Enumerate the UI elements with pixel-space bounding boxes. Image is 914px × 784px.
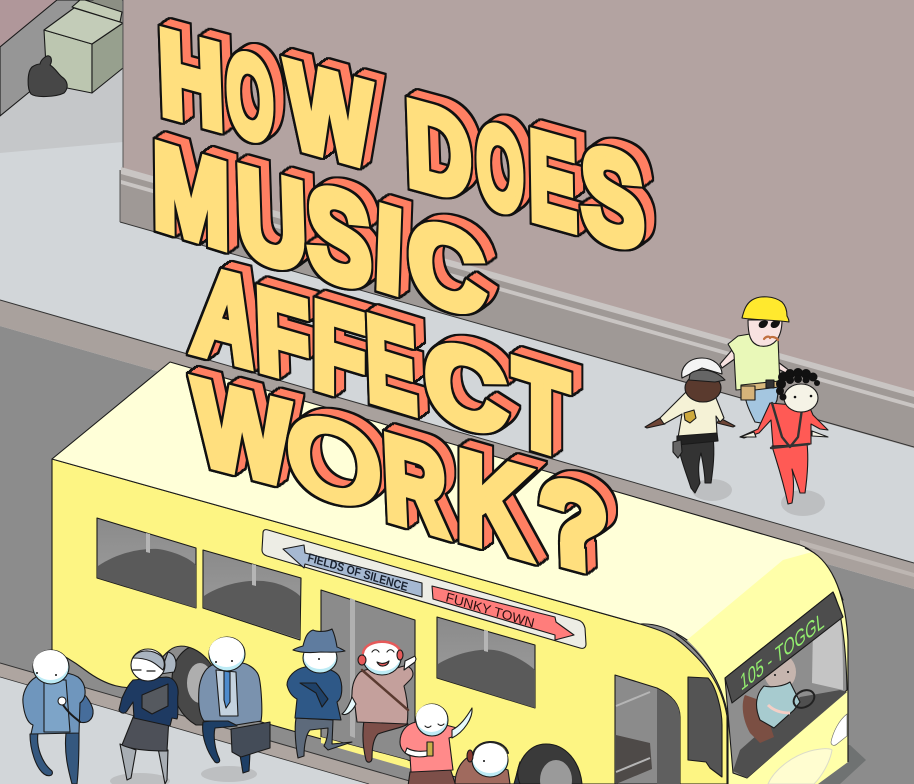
word: How: H xyxy=(156,4,226,155)
person: backpack commuter xyxy=(23,650,93,784)
bus xyxy=(52,362,848,784)
LED destination sign: 105 - TOGGL xyxy=(739,606,825,696)
alley far wall xyxy=(0,0,57,47)
front side window xyxy=(688,677,722,777)
word: Affect: T xyxy=(513,335,569,482)
word: Affect: E xyxy=(364,292,418,439)
word: How: O xyxy=(224,26,276,168)
trash bag xyxy=(28,56,67,97)
headlight xyxy=(831,714,847,745)
person: man in fedora xyxy=(287,629,352,758)
word: Does: S xyxy=(579,118,646,278)
near curb xyxy=(0,663,420,784)
bus front xyxy=(687,552,848,784)
person: hooded listener xyxy=(455,742,520,784)
window 2 xyxy=(203,550,301,640)
word: Music: I xyxy=(373,182,405,319)
front door xyxy=(615,675,680,784)
alley side wall xyxy=(0,0,123,116)
front emblem xyxy=(768,749,832,784)
baseboard xyxy=(120,167,914,448)
sign panel xyxy=(262,530,586,648)
arrow: funky town xyxy=(432,586,574,640)
building wall xyxy=(123,0,914,393)
window 1 xyxy=(97,518,196,608)
title: How Does Music Affect Work? xyxy=(152,4,646,601)
word: Work?: O xyxy=(282,384,386,539)
person: construction worker xyxy=(720,297,794,424)
arrow: fields of silence: FIELDS OF SILENCE xyxy=(306,550,409,594)
word: Does: E xyxy=(528,105,577,257)
driver xyxy=(743,654,818,743)
windshield xyxy=(725,592,847,778)
word: Music xyxy=(152,117,487,341)
word: Music: C xyxy=(406,195,487,341)
door xyxy=(321,590,415,770)
word: Affect: A xyxy=(188,243,263,392)
word: Work?: R xyxy=(381,410,449,562)
person: man in pink shirt xyxy=(400,704,472,784)
word: Does xyxy=(403,75,646,278)
word: Work? xyxy=(192,355,611,601)
road xyxy=(0,326,914,784)
front wheel xyxy=(516,744,582,784)
rear wheel hub xyxy=(187,663,213,703)
far curb xyxy=(0,300,914,589)
route sign xyxy=(262,530,586,648)
person: police officer xyxy=(645,358,735,493)
alley ground in shadow xyxy=(0,0,123,153)
word: Work?: W xyxy=(192,355,292,511)
word: Affect: C xyxy=(423,315,508,459)
person: man in grey suit xyxy=(199,637,270,773)
near sidewalk xyxy=(0,677,369,784)
character shadows xyxy=(110,479,825,784)
arrow: funky town: FUNKY TOWN xyxy=(444,589,536,631)
bus side xyxy=(52,459,727,784)
word: Music: U xyxy=(235,140,308,299)
word: How: W xyxy=(285,36,374,193)
person: laughing man with headphones xyxy=(342,641,416,762)
word: Affect: F xyxy=(254,264,311,409)
rear wheel xyxy=(172,645,222,725)
word: Work?: K xyxy=(457,426,530,585)
person: woman with folder xyxy=(119,649,178,784)
bus roof xyxy=(52,362,843,640)
bus shadow on road xyxy=(810,745,866,784)
dumpsters xyxy=(44,0,123,93)
word: Does: O xyxy=(474,98,526,239)
word: Does: D xyxy=(403,75,474,226)
word: Music: S xyxy=(305,158,373,317)
word: Affect: F xyxy=(312,275,365,427)
word: How xyxy=(156,4,374,193)
word: Music: M xyxy=(152,117,230,274)
word: Work?: ? xyxy=(537,451,611,601)
word: Affect xyxy=(188,243,569,482)
person: red jacket dancer xyxy=(740,368,828,504)
window 3 xyxy=(437,617,535,708)
